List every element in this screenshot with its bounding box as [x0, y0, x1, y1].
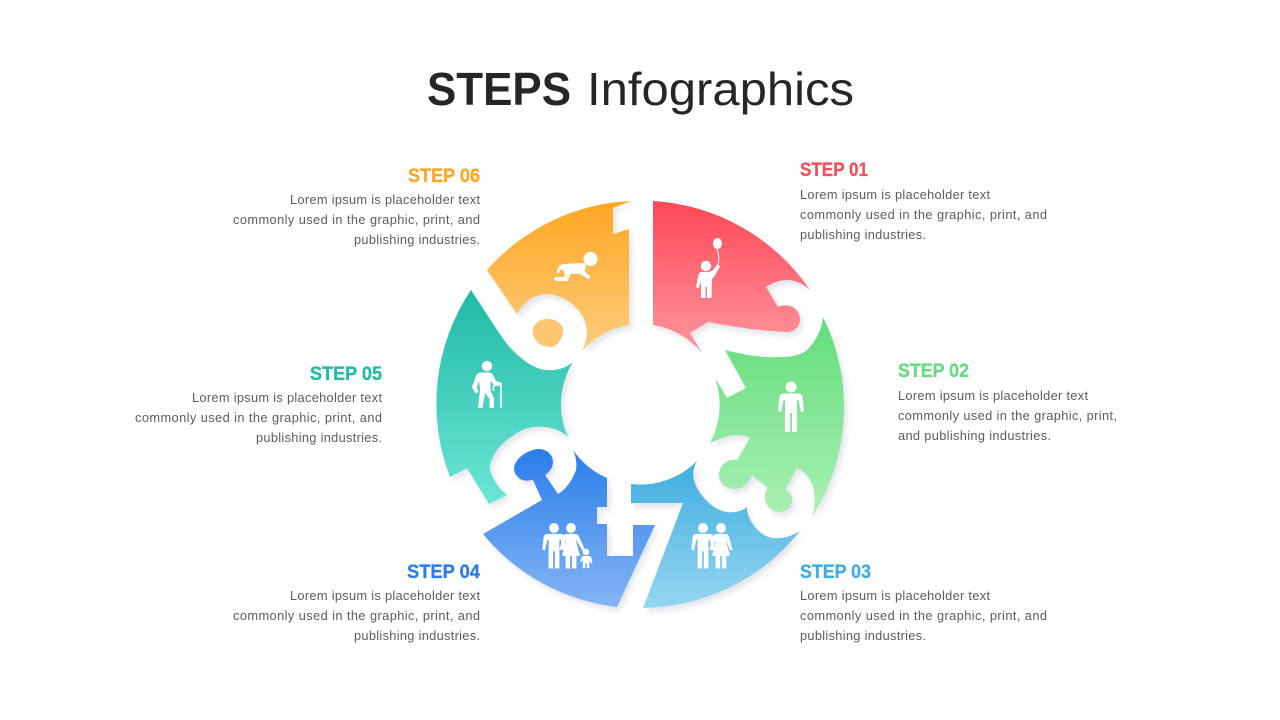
- title: Infographics: [587, 63, 854, 115]
- icon: elderly person with cane: [472, 361, 502, 408]
- step 01 text: Lorem ipsum is placeholder text: [800, 187, 990, 202]
- step 06 text: commonly used in the graphic, print, and: [233, 212, 480, 227]
- segment 3: light blue: [631, 460, 800, 608]
- step 03 text: publishing industries.: [800, 628, 926, 643]
- icon: crawling baby: [554, 252, 598, 281]
- segment 6: orange: [487, 201, 631, 351]
- icon: family: [542, 523, 592, 568]
- step 06 text: Lorem ipsum is placeholder text: [290, 192, 480, 207]
- step 01 text: STEP 01: [800, 159, 868, 181]
- step 05 text: publishing industries.: [256, 430, 382, 445]
- step 01 text: [800, 159, 1047, 242]
- step 04 text: Lorem ipsum is placeholder text: [290, 588, 480, 603]
- step 04 text: commonly used in the graphic, print, and: [233, 608, 480, 623]
- segment 2: green: [710, 317, 844, 517]
- step 05 text: commonly used in the graphic, print, and: [135, 410, 382, 425]
- icon: child with balloon: [696, 238, 722, 298]
- step 05 text: Lorem ipsum is placeholder text: [192, 390, 382, 405]
- step 02 text: commonly used in the graphic, print,: [898, 408, 1117, 423]
- icon: couple: [691, 523, 733, 568]
- step 04 text: STEP 04: [407, 561, 480, 583]
- step 06 text: [233, 165, 480, 247]
- segment 5: teal: [436, 290, 573, 504]
- step 05 text: STEP 05: [310, 363, 382, 385]
- icon: adult man: [778, 382, 804, 432]
- segment 1: red: [653, 201, 810, 353]
- step 02 text: [898, 360, 1117, 443]
- step 03 text: [800, 561, 1047, 643]
- step 06 text: STEP 06: [408, 165, 480, 187]
- step 03 text: STEP 03: [800, 561, 871, 583]
- title: STEPS: [427, 63, 571, 115]
- step 01 text: commonly used in the graphic, print, and: [800, 207, 1047, 222]
- step 04 text: [233, 561, 480, 643]
- step 05 text: [135, 363, 382, 445]
- title: [427, 63, 854, 115]
- step 02 text: Lorem ipsum is placeholder text: [898, 388, 1088, 403]
- step 06 text: publishing industries.: [354, 232, 480, 247]
- step 04 text: publishing industries.: [354, 628, 480, 643]
- digit 6 counter: [533, 319, 563, 347]
- segment 4: blue: [483, 449, 655, 607]
- step 02 text: and publishing industries.: [898, 428, 1051, 443]
- step 01 text: publishing industries.: [800, 227, 926, 242]
- step 02 text: STEP 02: [898, 360, 969, 382]
- step 03 text: commonly used in the graphic, print, and: [800, 608, 1047, 623]
- step 03 text: Lorem ipsum is placeholder text: [800, 588, 990, 603]
